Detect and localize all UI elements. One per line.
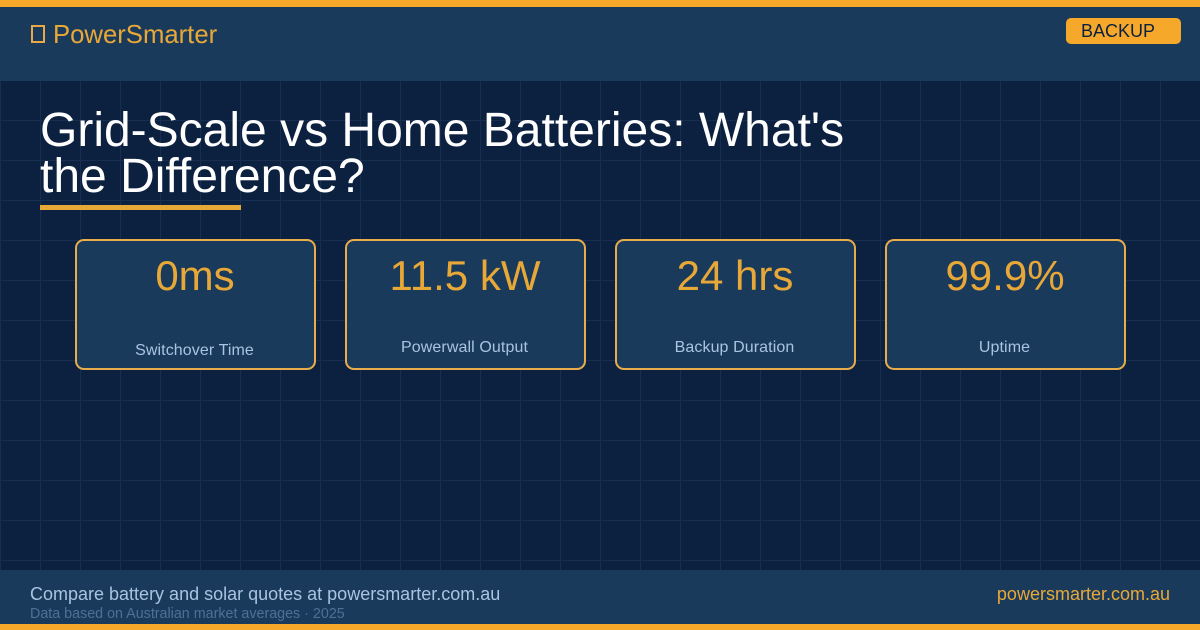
- stat value: 99.9%: [945, 252, 1065, 299]
- stat label: Switchover Time: [135, 342, 254, 359]
- bottom accent bar: [0, 624, 1200, 630]
- stat label: Powerwall Output: [401, 339, 528, 356]
- footer url: powersmarter.com.au: [997, 584, 1170, 604]
- footer band: [0, 570, 1200, 624]
- stat card: uptime: [885, 239, 1126, 370]
- title: Grid-Scale vs Home Batteries: What's: [40, 104, 844, 157]
- top accent bar: [0, 0, 1200, 7]
- title: the Difference?: [40, 150, 365, 202]
- stat card: switchover time: [75, 239, 316, 370]
- stat card: backup duration: [615, 239, 856, 370]
- stat card: powerwall output: [345, 239, 586, 370]
- stat label: Uptime: [979, 339, 1030, 356]
- title: [40, 104, 844, 202]
- stat value: 24 hrs: [677, 252, 793, 299]
- footer call to action: Compare battery and solar quotes at powersmarter.com.au: [30, 584, 500, 604]
- stat value: 0ms: [155, 252, 235, 299]
- stat value: 11.5 kW: [390, 252, 540, 299]
- stat label: Backup Duration: [675, 339, 794, 356]
- title underline: [40, 205, 241, 210]
- badge: BACKUP: [1066, 18, 1181, 44]
- logo wordmark: PowerSmarter: [53, 21, 217, 49]
- badge: BACKUP: BACKUP: [1081, 21, 1155, 41]
- header band: [0, 7, 1200, 81]
- footer data note: Data based on Australian market averages · 2025: [30, 606, 345, 622]
- icon: missing-glyph battery box: [31, 25, 45, 43]
